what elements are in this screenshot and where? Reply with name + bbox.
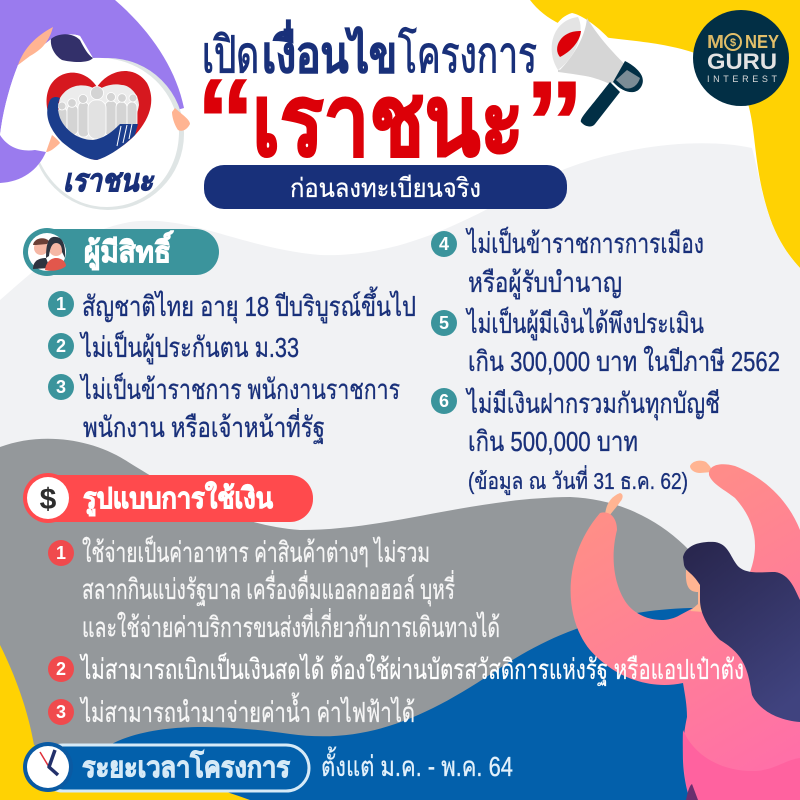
- usage item 1: ใช้จ่ายเป็นค่าอาหาร ค่าสินค้าต่างๆ ไม่รวม: [82, 535, 430, 568]
- eligibility item 1: 1: [56, 294, 66, 314]
- icon: clock hands: [40, 750, 58, 775]
- hands: [605, 461, 712, 515]
- eligibility item 4: หรือผู้รับบำนาญ: [468, 267, 622, 300]
- section header: ผู้มีสิทธิ์: [23, 228, 219, 276]
- icon: couple: [33, 237, 66, 271]
- background: blue wave: [108, 608, 800, 800]
- icon: red heart: [47, 71, 151, 160]
- subtitle pill: [204, 165, 567, 209]
- brand badge: Money Guru Interest: GURU: [707, 49, 777, 74]
- background: dark grey wave: [0, 439, 720, 800]
- eligibility item 6: ไม่มีเงินฝากรวมกันทุกบัญชี: [465, 388, 720, 421]
- usage item 2: 2: [56, 659, 66, 679]
- subtitle pill: ก่อนลงทะเบียนจริง: [290, 173, 481, 203]
- eligibility item 4: ไม่เป็นข้าราชการการเมือง: [466, 226, 704, 259]
- illustration: hair and hands holding the badge: [0, 27, 190, 183]
- eligibility item 5: [431, 306, 780, 377]
- brand badge: Money Guru Interest: NEY: [745, 32, 779, 52]
- eligibility item 5: ไม่เป็นผู้มีเงินได้พึงประเมิน: [465, 306, 704, 341]
- eligibility item 4: [431, 226, 704, 300]
- eligibility item 6: เกิน 500,000 บาท: [468, 426, 638, 457]
- eligibility item 3: 3: [56, 377, 66, 397]
- leg shadow: [686, 784, 698, 800]
- body and arms: [571, 464, 800, 800]
- usage item 3: [48, 692, 415, 728]
- usage item 1: และใช้จ่ายค่าบริการขนส่งที่เกี่ยวกับการเดินทางได้: [82, 608, 500, 643]
- icon: crowd of people: [58, 86, 137, 139]
- illustration: purple sleeve top-left: [0, 0, 184, 135]
- brand badge: Money Guru Interest: $: [730, 37, 736, 49]
- brand badge: Money Guru Interest: M: [707, 32, 724, 52]
- eligibility item 6: (ข้อมูล ณ วันที่ 31 ธ.ค. 62): [468, 465, 688, 495]
- usage item 1: 1: [56, 543, 66, 563]
- icon: megaphone: [550, 13, 643, 126]
- logo badge: เราชนะ: [0, 34, 184, 210]
- eligibility item 3: พนักงาน หรือเจ้าหน้าที่รัฐ: [83, 408, 325, 444]
- eligibility item 1: [48, 286, 416, 324]
- hair: [683, 542, 800, 722]
- usage item 1: สลากกินแบ่งรัฐบาล เครื่องดื่มแอลกอฮอล์ บุหรี่: [82, 570, 455, 607]
- title line 2: quoted red: เราชนะ: [252, 65, 524, 177]
- title line 1: [202, 21, 537, 83]
- eligibility item 6: 6: [439, 391, 449, 411]
- section header: ผู้มีสิทธิ์: ผู้มีสิทธิ์: [84, 230, 174, 270]
- title line 2: quoted red: ”: [525, 57, 584, 189]
- section header: รูปแบบการใช้เงิน: [23, 473, 313, 523]
- title line 1: โครงการ: [398, 27, 537, 83]
- face and neck: [686, 570, 704, 612]
- eligibility item 6: [431, 388, 720, 495]
- usage item 1: [48, 535, 500, 643]
- icon: dollar sign: $: [40, 483, 57, 516]
- usage item 3: 3: [56, 702, 66, 722]
- brand badge: Money Guru Interest: [693, 10, 789, 106]
- background: yellow bottom-left blob: [0, 645, 250, 800]
- title line 1: เงื่อนไข: [262, 21, 397, 83]
- section header: รูปแบบการใช้เงิน: รูปแบบการใช้เงิน: [83, 481, 273, 516]
- usage item 3: ไม่สามารถนำมาจ่ายค่าน้ำ ค่าไฟฟ้าได้: [80, 692, 415, 728]
- eligibility item 5: 5: [439, 313, 449, 333]
- background: yellow top-right blob: [530, 0, 800, 268]
- brand badge: Money Guru Interest: INTEREST: [707, 74, 778, 84]
- eligibility item 3: ไม่เป็นข้าราชการ พนักงานราชการ: [79, 372, 400, 405]
- logo wordmark: เราชนะ: [63, 163, 155, 198]
- eligibility item 1: สัญชาติไทย อายุ 18 ปีบริบูรณ์ขึ้นไป: [82, 286, 416, 324]
- icon: heart inner: [59, 84, 139, 146]
- eligibility item 2: [48, 330, 299, 365]
- icon: blue supporting hand: [47, 97, 138, 160]
- title line 2: quoted red: “: [196, 55, 255, 187]
- section header: ระยะเวลาโครงการ: ระยะเวลาโครงการ: [82, 749, 290, 784]
- eligibility item 3: [48, 372, 400, 444]
- section header: ระยะเวลาโครงการ: [23, 742, 309, 792]
- project period dates: ตั้งแต่ ม.ค. - พ.ค. 64: [321, 746, 513, 782]
- skirt: [683, 730, 800, 800]
- illustration: woman with raised arms: [571, 461, 800, 800]
- title line 1: เปิด: [202, 27, 259, 83]
- eligibility item 4: 4: [439, 234, 449, 254]
- eligibility item 2: 2: [56, 336, 66, 356]
- eligibility item 2: ไม่เป็นผู้ประกันตน ม.33: [79, 330, 299, 365]
